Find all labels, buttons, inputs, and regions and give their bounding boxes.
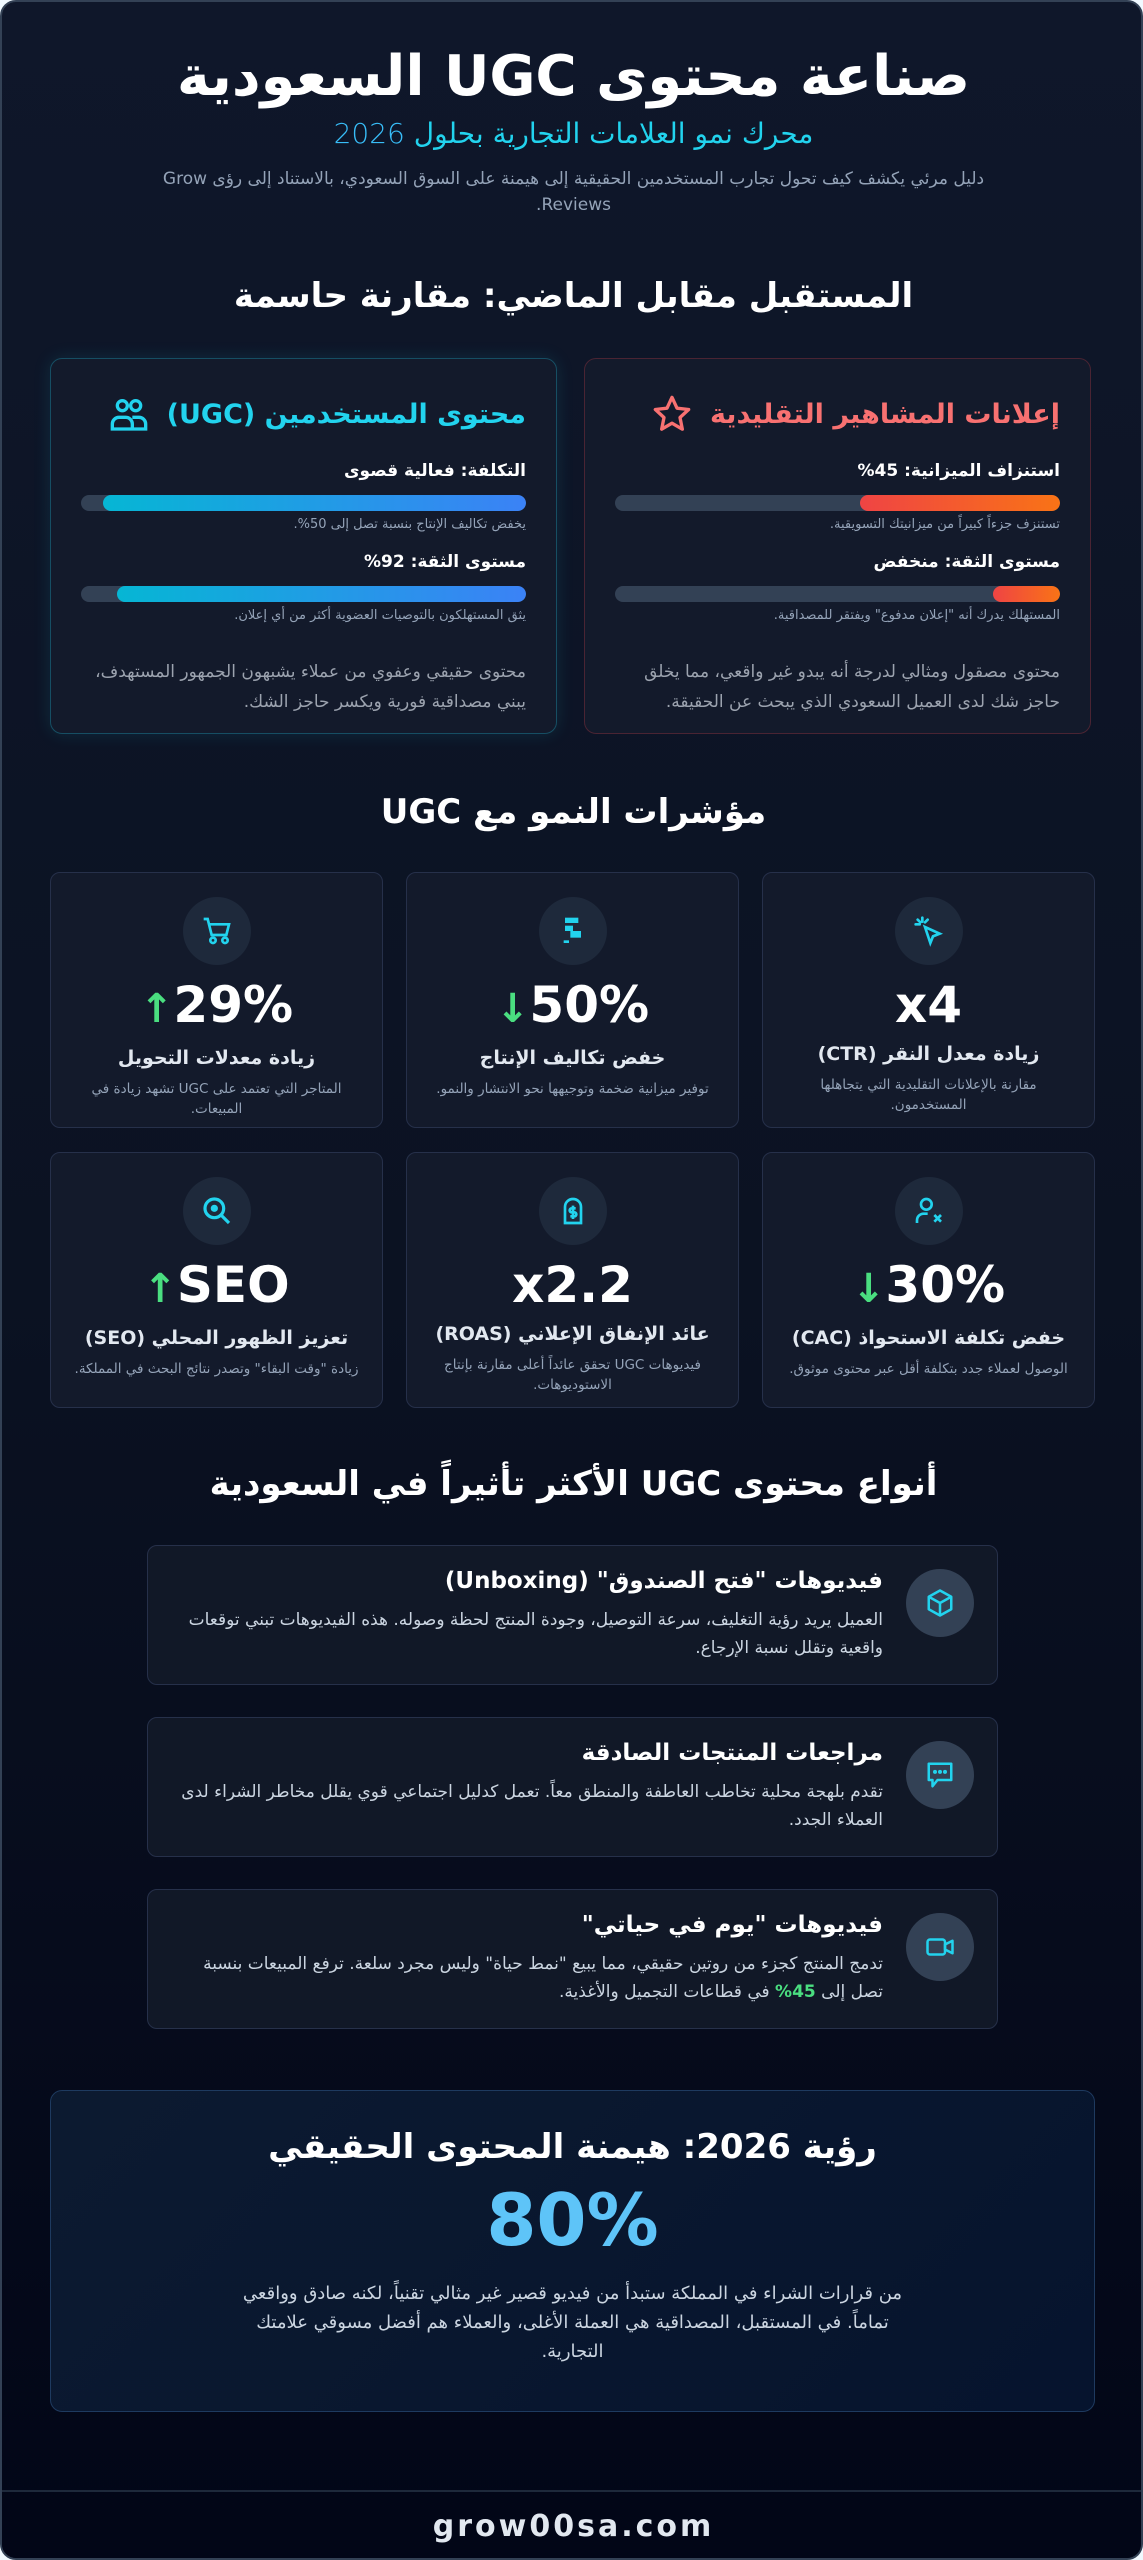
metric: ROAS: فيديوهات UGC تحقق عائداً أعلى مقارنة بإنتاج الاستوديوهات.	[444, 1357, 701, 1393]
type card: reviews: تقدم بلهجة محلية تخاطب العاطفة والمنطق معاً. تعمل كدليل اجتماعي قوي يقلل مخاطر الشراء لدى العملاء الجدد.	[181, 1782, 883, 1830]
description: دليل مرئي يكشف كيف تحول تجارب المستخدمين الحقيقية إلى هيمنة على السوق السعودي، بالاستناد إلى رؤى Grow Reviews.	[163, 169, 984, 215]
metric: conversion: ↑29%	[140, 976, 293, 1034]
header traditional: إعلانات المشاهير التقليدية	[710, 398, 1060, 430]
metric: ROAS	[406, 1152, 739, 1408]
metric: production cost: توفير ميزانية ضخمة وتوجيهها نحو الانتشار والنمو.	[436, 1081, 709, 1097]
metric: production cost: خفض تكاليف الإنتاج	[480, 1047, 665, 1069]
metric: CAC	[762, 1152, 1095, 1408]
metric: CAC: ↓30%	[852, 1256, 1005, 1314]
panel: UGC: التكلفة: فعالية قصوى	[344, 461, 526, 481]
metric: CTR: مقارنة بالإعلانات التقليدية التي يتجاهلها المستخدمون.	[820, 1077, 1037, 1113]
type card: unboxing: فيديوهات "فتح الصندوق" (Unboxing)	[445, 1568, 883, 1594]
metric: conversion	[50, 872, 383, 1128]
icon: users	[110, 399, 148, 431]
heading: growth metrics: مؤشرات النمو مع UGC	[381, 792, 766, 832]
type card: unboxing	[147, 1545, 998, 1685]
icon: box	[906, 1569, 974, 1637]
metric: SEO: ↑SEO	[143, 1256, 290, 1314]
metric: production cost	[406, 872, 739, 1128]
metric: ROAS: x2.2	[512, 1256, 633, 1314]
title: صناعة محتوى UGC السعودية	[177, 44, 970, 109]
panel: UGC: يخفض تكاليف الإنتاج بنسبة تصل إلى 50%.	[293, 517, 526, 532]
heading: content types: أنواع محتوى UGC الأكثر تأثيراً في السعودية	[210, 1464, 937, 1504]
panel: traditional celebrity ads: المستهلك يدرك أنه "إعلان مدفوع" ويفتقر للمصداقية.	[774, 608, 1060, 623]
icon: star	[654, 396, 690, 431]
panel: UGC: يثق المستهلكون بالتوصيات العضوية أكثر من أي إعلان.	[234, 608, 526, 623]
metric: conversion: زيادة معدلات التحويل	[118, 1047, 315, 1069]
metric: CTR: x4	[895, 976, 962, 1034]
panel: UGC: مستوى الثقة: 92%	[364, 552, 526, 572]
metric: CAC: الوصول لعملاء جدد بتكلفة أقل عبر محتوى موثوق.	[789, 1361, 1068, 1377]
metric: SEO	[50, 1152, 383, 1408]
metric: CTR	[762, 872, 1095, 1128]
panel: UGC: محتوى حقيقي وعفوي من عملاء يشبهون الجمهور المستهدف، يبني مصداقية فورية ويكسر حاجز الشك.	[95, 662, 526, 712]
type card: unboxing: العميل يريد رؤية التغليف، سرعة التوصيل، وجودة المنتج لحظة وصوله. هذه الفيديوهات تبني توقعات واقعية وتقلل نسبة الإرجاع.	[189, 1610, 883, 1658]
vision text: من قرارات الشراء في المملكة ستبدأ من فيديو قصير غير مثالي تقنياً، لكنه صادق وواقعي تماماً. في المستقبل، المصداقية هي العملة الأغلى، والعملاء هم أفضل مسوقي علامتك التجارية.	[243, 2283, 902, 2362]
panel: traditional celebrity ads: محتوى مصقول ومثالي لدرجة أنه يبدو غير واقعي، مما يخلق حاجز شك لدى العميل السعودي الذي يبحث عن الحقيقة.	[644, 662, 1060, 712]
panel: traditional celebrity ads: مستوى الثقة: منخفض	[874, 552, 1060, 572]
subtitle: محرك نمو العلامات التجارية بحلول 2026	[334, 117, 813, 150]
type card: day in my life	[147, 1889, 998, 2029]
metric: production cost: ↓50%	[496, 976, 649, 1034]
icon: video	[906, 1913, 974, 1981]
panel: vision 2026	[50, 2090, 1095, 2412]
header UGC: محتوى المستخدمين (UGC)	[167, 398, 526, 430]
panel: traditional celebrity ads: استنزاف الميزانية: 45%	[857, 461, 1060, 481]
panel: traditional celebrity ads	[584, 358, 1091, 734]
type card: day in my life: فيديوهات "يوم في حياتي"	[582, 1912, 883, 1938]
type card: reviews: مراجعات المنتجات الصادقة	[582, 1740, 883, 1766]
metric: CAC: خفض تكلفة الاستحواذ (CAC)	[792, 1327, 1065, 1349]
metric: SEO: تعزيز الظهور المحلي (SEO)	[85, 1327, 348, 1349]
metric: CTR: زيادة معدل النقر (CTR)	[818, 1043, 1039, 1065]
icon: chat	[906, 1741, 974, 1809]
footer domain: grow00sa.com	[433, 2509, 714, 2544]
heading: comparison: المستقبل مقابل الماضي: مقارنة حاسمة	[234, 276, 913, 316]
big number 80%: 80%	[486, 2178, 659, 2262]
panel: traditional celebrity ads: تستنزف جزءاً كبيراً من ميزانيتك التسويقية.	[830, 517, 1060, 532]
metric: conversion: المتاجر التي تعتمد على UGC تشهد زيادة في المبيعات.	[92, 1081, 341, 1117]
type card: reviews	[147, 1717, 998, 1857]
vision title: رؤية 2026: هيمنة المحتوى الحقيقي	[268, 2127, 877, 2167]
metric: SEO: زيادة "وقت البقاء" وتصدر نتائج البحث في المملكة.	[75, 1361, 358, 1377]
type card: day in my life: تدمج المنتج كجزء من روتين حقيقي، مما يبيع "نمط حياة" وليس مجرد سلعة. ترفع المبيعات بنسبة تصل إلى 45% في قطاعات التجميل والأغذية.	[203, 1954, 883, 2002]
metric: ROAS: عائد الإنفاق الإعلاني (ROAS)	[435, 1323, 710, 1345]
footer	[2, 2490, 1143, 2560]
panel: UGC	[50, 358, 557, 734]
